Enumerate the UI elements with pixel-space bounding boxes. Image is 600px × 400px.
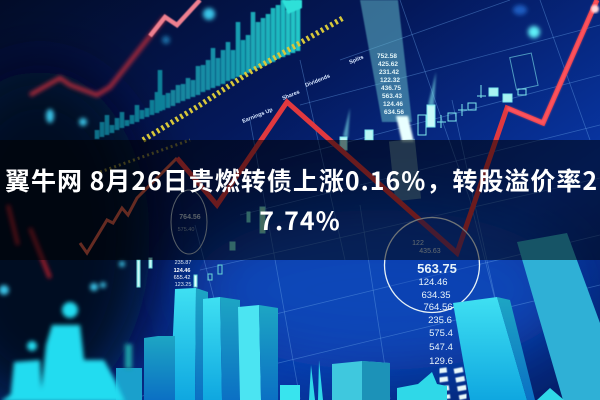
title: 7.74%	[259, 202, 341, 238]
upper left red line	[30, 17, 165, 95]
perspective grid	[130, 0, 600, 399]
bright teal corner	[282, 0, 302, 14]
small ellipse with numbers: 655.42	[174, 275, 190, 281]
dim yellow second band	[100, 140, 190, 172]
number column: 231.42	[379, 69, 399, 76]
chart labels: Splits	[349, 55, 365, 66]
dark corner at left	[0, 70, 150, 400]
blue glow	[190, 210, 570, 370]
small ellipse with numbers: 575.40	[178, 227, 194, 233]
teal volume bars upper	[97, 0, 298, 139]
large circle with numbers: 547.4	[429, 342, 453, 353]
large circle with numbers: 435.63	[419, 248, 441, 255]
bottom left 3d bars	[116, 288, 300, 400]
large circle with numbers: 124.46	[418, 277, 448, 288]
bright spot on red line	[591, 5, 599, 13]
small ellipse with numbers: 235.87	[175, 260, 191, 266]
large circle with numbers: 235.6	[428, 315, 452, 326]
number column: 563.43	[382, 93, 402, 100]
blurred lights	[0, 5, 540, 295]
number column: 436.75	[381, 85, 401, 92]
dotted number trail	[442, 368, 464, 399]
red line highlight	[507, 0, 597, 123]
chart labels	[242, 55, 365, 125]
candlesticks	[340, 53, 538, 150]
small ellipse with numbers: 123.25	[175, 282, 191, 288]
large circle with numbers: 764.56	[423, 302, 453, 313]
large circle with numbers: 122	[412, 240, 424, 247]
number column: 124.46	[383, 101, 403, 108]
large circle with numbers: 563.75	[417, 261, 457, 276]
large circle with numbers: 634.35	[421, 290, 451, 301]
title	[5, 162, 598, 238]
small ellipse with numbers	[171, 190, 207, 288]
small ellipse with numbers: 124.46	[174, 268, 190, 274]
number column	[377, 53, 404, 116]
chart labels: Dividends	[305, 73, 331, 89]
title: 翼牛网 8月26日贵燃转债上涨0.16%，转股溢价率2	[5, 162, 598, 198]
number column: 425.62	[378, 61, 398, 68]
chart labels: Earnings Up	[242, 107, 274, 125]
cyan light rays on candles	[343, 72, 436, 138]
small candles at band	[137, 207, 265, 287]
blurred left bars	[0, 302, 132, 400]
yellow striped trend band	[143, 18, 343, 140]
number column: 634.56	[384, 109, 404, 116]
large circle with numbers	[384, 218, 480, 367]
white column glow	[396, 116, 414, 142]
number column: 122.32	[380, 77, 400, 84]
number column: 752.58	[377, 53, 397, 60]
right bottom 3d bars	[309, 233, 600, 400]
large circle with numbers: 129.6	[429, 356, 453, 367]
large circle with numbers: 575.4	[429, 328, 453, 339]
chart labels: Shares	[282, 89, 301, 102]
number column band	[360, 0, 412, 122]
column continuation	[389, 139, 421, 201]
lower left red line	[8, 205, 50, 278]
bright red tip	[150, 0, 200, 36]
small ellipse with numbers: 764.56	[179, 214, 201, 221]
title band	[0, 140, 600, 260]
left zigzag red line	[80, 158, 177, 253]
main red trend line	[177, 0, 597, 253]
